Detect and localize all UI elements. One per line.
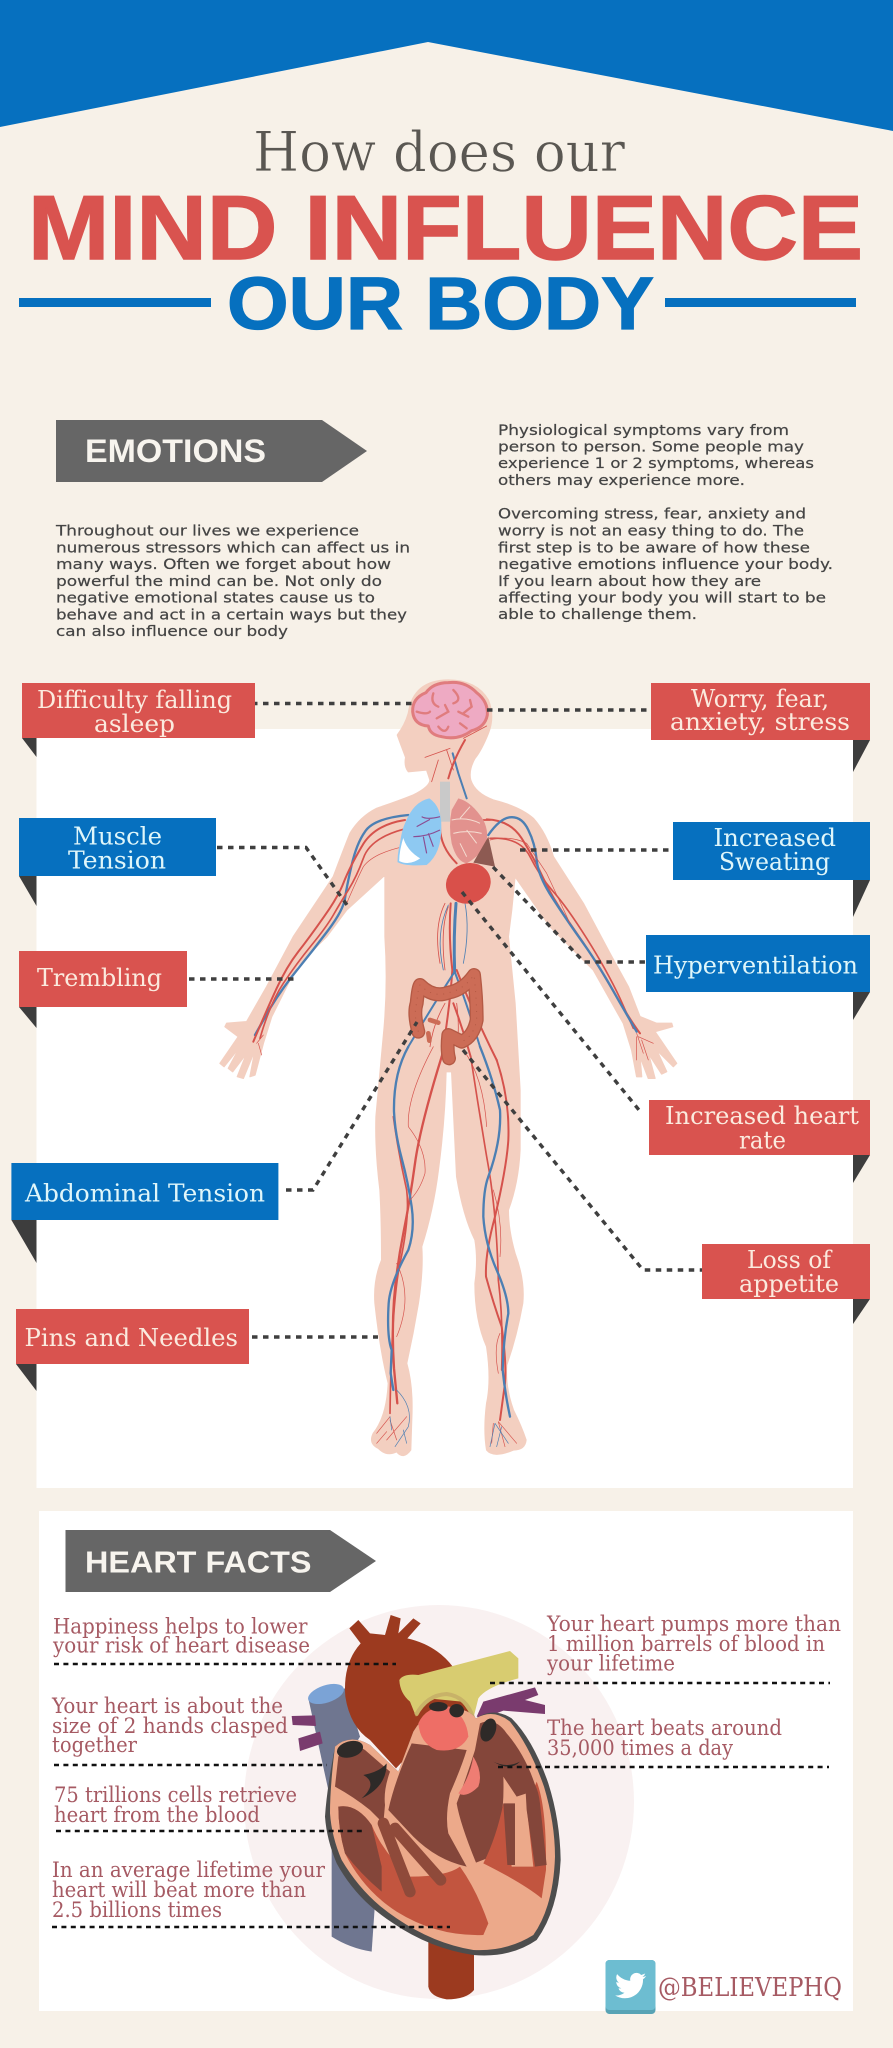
label: difficulty falling asleep (22, 683, 255, 757)
foot vessels (377, 1390, 517, 1447)
text block: emotions intro: can also influence our body (56, 623, 288, 640)
fact: heart size: Your heart is about the (51, 1694, 283, 1719)
illustration: heart (292, 1615, 561, 1999)
liver (473, 837, 495, 867)
text block: overcoming stress: first step is to be aware of how these (498, 539, 810, 556)
text block: overcoming stress: affecting your body you will start to be (498, 590, 826, 606)
text block: overcoming stress: worry is not an easy thing to do. The (498, 522, 804, 540)
fact: barrels of blood: 1 million barrels of blood in (547, 1632, 825, 1657)
heart peach muscle (330, 1708, 555, 1950)
fact: lifetime beats: In an average lifetime your (52, 1858, 326, 1883)
connector: muscle tension (217, 848, 347, 905)
text block: overcoming stress (498, 506, 833, 623)
lung: left blue (398, 798, 441, 865)
fact: barrels of blood: Your heart pumps more than (546, 1612, 841, 1637)
text block: symptoms vary: others may experience more. (498, 472, 745, 489)
leg vessels right (463, 1047, 510, 1420)
colon (415, 975, 477, 1058)
brain (413, 682, 487, 738)
papillary muscles (383, 1823, 441, 1892)
label: loss of appetite (702, 1244, 870, 1324)
body silhouette (220, 680, 677, 1455)
label: worry fear anxiety stress: Worry, fear, (691, 685, 829, 713)
text block: emotions intro: Throughout our lives we experience (55, 522, 359, 540)
text block: overcoming stress: If you learn about how they are (498, 573, 761, 590)
illustration: human body (220, 680, 677, 1455)
fact: heart size: together (52, 1733, 138, 1758)
fact: lifetime beats: 2.5 billions times (52, 1898, 222, 1923)
panel: heart facts background (39, 1511, 853, 2011)
text block: symptoms vary (498, 422, 814, 489)
text block: emotions intro (55, 522, 410, 640)
text block: overcoming stress: able to challenge them. (498, 606, 697, 623)
text block: emotions intro: many ways. Often we forget about how (56, 556, 391, 573)
connector: pins and needles (252, 1335, 378, 1339)
title line: How does our: How does our (253, 120, 626, 184)
pale circle behind heart (244, 1605, 634, 1999)
fact: beats per day: 35,000 times a day (547, 1736, 734, 1761)
text block: emotions intro: powerful the mind can be. Not only do (56, 573, 382, 590)
fact: beats per day (498, 1716, 829, 1767)
label: pins and needles: Pins and Needles (24, 1324, 238, 1352)
pulmonary veins left (292, 1715, 323, 1751)
title (19, 120, 863, 345)
label: worry fear anxiety stress: anxiety, stress (670, 708, 850, 736)
fact: lifetime beats: heart will beat more than (52, 1878, 306, 1903)
text block: symptoms vary: Physiological symptoms vary from (498, 422, 789, 439)
descending vessel (428, 1940, 474, 1999)
label: hyperventilation: Hyperventilation (653, 952, 858, 980)
fact: barrels of blood (490, 1612, 841, 1683)
label: increased sweating: Sweating (719, 848, 830, 876)
icon: twitter (606, 1960, 656, 2014)
label: increased heart rate: Increased heart (665, 1102, 859, 1130)
left chamber (457, 1721, 537, 1863)
connector: increased heart rate (462, 892, 639, 1110)
leg vessels left (388, 1047, 442, 1413)
title line: MIND INFLUENCE: MIND INFLUENCE (28, 178, 863, 279)
arm vessels left (253, 815, 408, 1042)
vena cava (306, 1680, 375, 1952)
trachea (440, 782, 450, 822)
connector: trembling (189, 977, 295, 981)
label: hyperventilation (646, 935, 870, 1020)
text block: overcoming stress: Overcoming stress, fear, anxiety and (498, 506, 806, 523)
label: difficulty falling asleep: asleep (94, 710, 175, 738)
fact: trillions of cells: heart from the blood (54, 1803, 260, 1828)
label: muscle tension (19, 818, 216, 906)
text block: symptoms vary: experience 1 or 2 symptoms, whereas (498, 455, 814, 472)
label: abdominal tension: Abdominal Tension (24, 1180, 265, 1208)
heading arrow: emotions: EMOTIONS (85, 433, 266, 469)
fact: heart size (51, 1694, 327, 1765)
lung: right pink (450, 798, 487, 863)
fact: happiness: your risk of heart disease (52, 1634, 310, 1658)
title rule right (665, 298, 856, 307)
connector: worry fear anxiety stress (487, 708, 652, 712)
fact: beats per day: The heart beats around (547, 1716, 782, 1741)
label: increased sweating: Increased (714, 824, 836, 852)
dark valve openings (335, 1702, 520, 1798)
text block: emotions intro: numerous stressors which can affect us in (56, 539, 410, 556)
connector: hyperventilation (493, 867, 646, 962)
label: increased heart rate: rate (739, 1127, 786, 1155)
connector: loss of appetite (463, 1050, 702, 1270)
fact: lifetime beats (52, 1858, 450, 1927)
fact: happiness (52, 1614, 396, 1664)
pulmonary artery (399, 1651, 518, 1718)
central chamber (388, 1743, 467, 1867)
fact: happiness: Happiness helps to lower (53, 1614, 308, 1640)
aorta (345, 1615, 470, 1768)
right ventricle (338, 1806, 488, 1935)
label: abdominal tension (11, 1163, 278, 1263)
pulmonary veins right (477, 1687, 545, 1718)
label: loss of appetite: appetite (739, 1270, 839, 1298)
twitter handle: @BELIEVEPHQ (658, 1973, 842, 2003)
title line: OUR BODY: OUR BODY (227, 262, 654, 345)
heading arrow: heart facts: HEART FACTS (85, 1545, 312, 1580)
title rule left (19, 298, 211, 307)
fact: heart size: size of 2 hands clasped (52, 1714, 288, 1739)
label: muscle tension: Muscle (73, 822, 162, 850)
connector: increased sweating (520, 848, 673, 852)
right atrium (335, 1746, 390, 1823)
text block: emotions intro: behave and act in a certain ways but they (56, 606, 407, 623)
heading arrow: heart facts (66, 1530, 376, 1592)
fact: trillions of cells (54, 1783, 363, 1831)
label: muscle tension: Tension (68, 846, 166, 874)
connector: difficulty falling asleep (252, 702, 413, 705)
panel: body map background (36, 729, 853, 1488)
neck vessels (425, 726, 487, 798)
label: trembling (19, 951, 187, 1028)
text block: overcoming stress: negative emotions influence your body. (498, 556, 833, 573)
aortic valve (418, 1707, 468, 1751)
label: worry fear anxiety stress (651, 683, 870, 772)
connector: abdominal tension (286, 1022, 417, 1190)
valve ring (416, 1694, 473, 1718)
left ventricle (483, 1782, 546, 1898)
fact: trillions of cells: 75 trillions cells retrieve (54, 1783, 297, 1808)
label: pins and needles (16, 1309, 249, 1391)
top blue banner (0, 0, 893, 131)
text block: emotions intro: negative emotional states cause us to (56, 590, 375, 606)
text block: symptoms vary: person to person. Some people may (498, 438, 804, 456)
label: difficulty falling asleep: Difficulty falling (37, 686, 232, 714)
fact: barrels of blood: your lifetime (546, 1652, 675, 1676)
label: loss of appetite: Loss of (747, 1246, 833, 1274)
heart dark outer wall (325, 1708, 561, 1956)
label: increased sweating (673, 822, 870, 917)
label: increased heart rate (649, 1100, 870, 1183)
mitral valve (458, 1757, 480, 1795)
stomach (440, 857, 496, 910)
arm vessels right (257, 817, 653, 1060)
torso vessels (408, 820, 497, 1060)
heading arrow: emotions (56, 420, 367, 482)
label: trembling: Trembling (37, 964, 162, 992)
